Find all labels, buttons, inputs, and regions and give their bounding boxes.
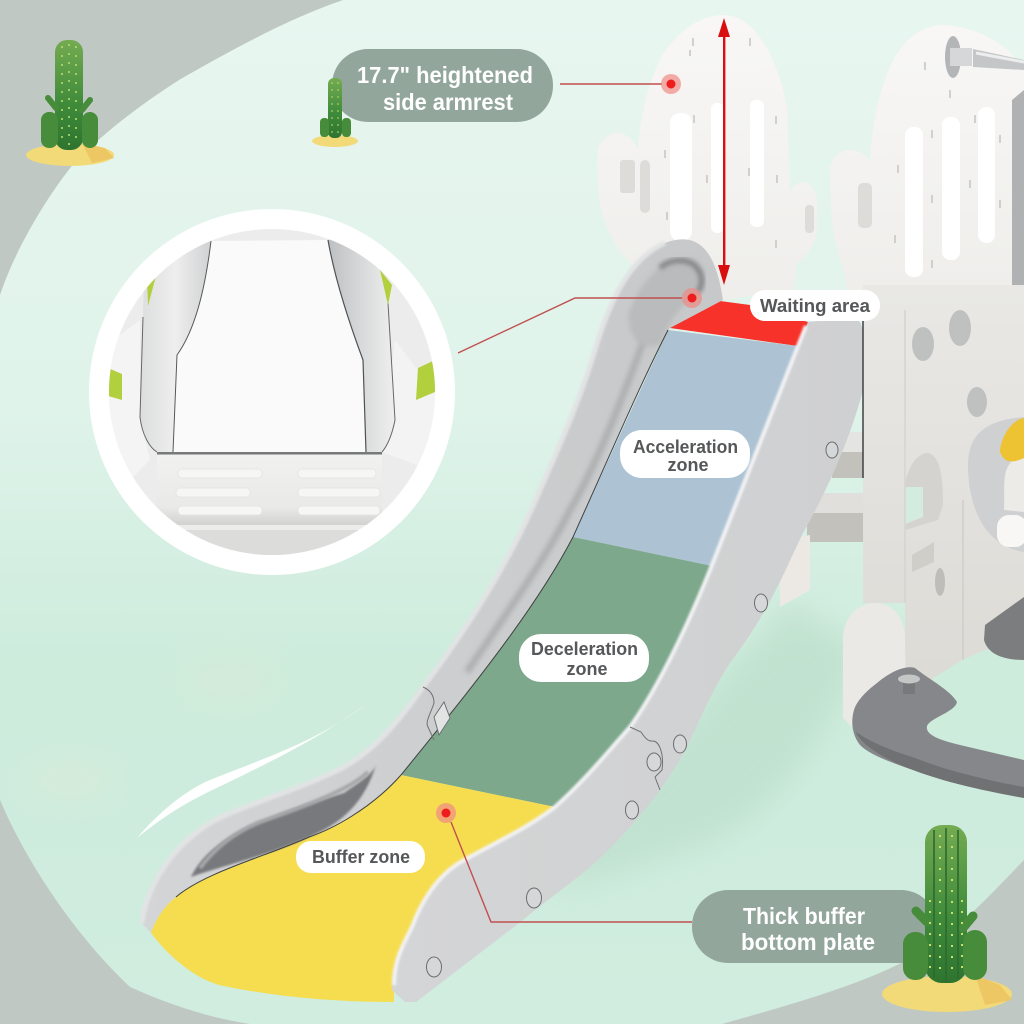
slide: head groove (628, 258, 704, 346)
pointer: heightened armrest (560, 74, 681, 94)
stairs (780, 432, 865, 607)
side grey ladder post (1012, 90, 1024, 410)
slide zone: buffer yellow (151, 775, 555, 1002)
icon: cactus top left (26, 40, 114, 166)
swing seat (968, 417, 1024, 552)
label: thick buffer callout: bottom plate (741, 929, 875, 955)
label: armrest callout (332, 49, 553, 122)
label: acceleration zone (620, 430, 750, 478)
slide zone: waiting area red (670, 301, 808, 346)
slide: long armrest groove (467, 325, 650, 672)
detail circle (89, 209, 455, 575)
icon: cactus bottom right (882, 825, 1012, 1012)
slide: lower armrest grip (191, 765, 376, 877)
arrow: height dimension (718, 18, 730, 285)
label: acceleration zone: zone (668, 454, 708, 475)
label: thick buffer callout: Thick buffer (743, 903, 865, 929)
label: armrest callout: 17.7" heightened (357, 62, 533, 88)
label: armrest callout: side armrest (383, 89, 513, 115)
slide: left rail (142, 239, 723, 933)
panel: back cactus panel 2 (830, 25, 1024, 290)
label: thick buffer callout (692, 890, 937, 963)
floor shade below the slide (560, 600, 860, 890)
label: deceleration zone: Deceleration (531, 638, 638, 659)
slide: right rail (392, 318, 863, 1002)
pointer line: circle to armrest (458, 288, 702, 353)
panel: back cactus panel 1 (597, 15, 817, 300)
label: deceleration zone: zone (566, 658, 608, 679)
screws (426, 442, 838, 977)
metal bar and bolt (945, 36, 1024, 78)
base: grey frame (852, 597, 1024, 798)
faint ghost cactus marks (25, 650, 285, 802)
label: waiting area: Waiting area (760, 295, 871, 316)
label: deceleration zone (519, 634, 649, 682)
panel: front panel of tower (843, 285, 1024, 735)
label: buffer zone (296, 841, 425, 873)
slide zone: deceleration green (401, 537, 712, 807)
grips (912, 310, 987, 417)
joint on left rail (423, 687, 450, 740)
pointer: thick buffer plate (436, 803, 692, 922)
label: waiting area (750, 290, 880, 321)
label: acceleration zone: Acceleration (633, 436, 738, 457)
swoosh (137, 705, 365, 838)
slide zone: acceleration blue (573, 330, 798, 566)
label: buffer zone: Buffer zone (312, 846, 410, 867)
icon: small cactus (312, 78, 358, 147)
joint on right rail (630, 727, 663, 790)
